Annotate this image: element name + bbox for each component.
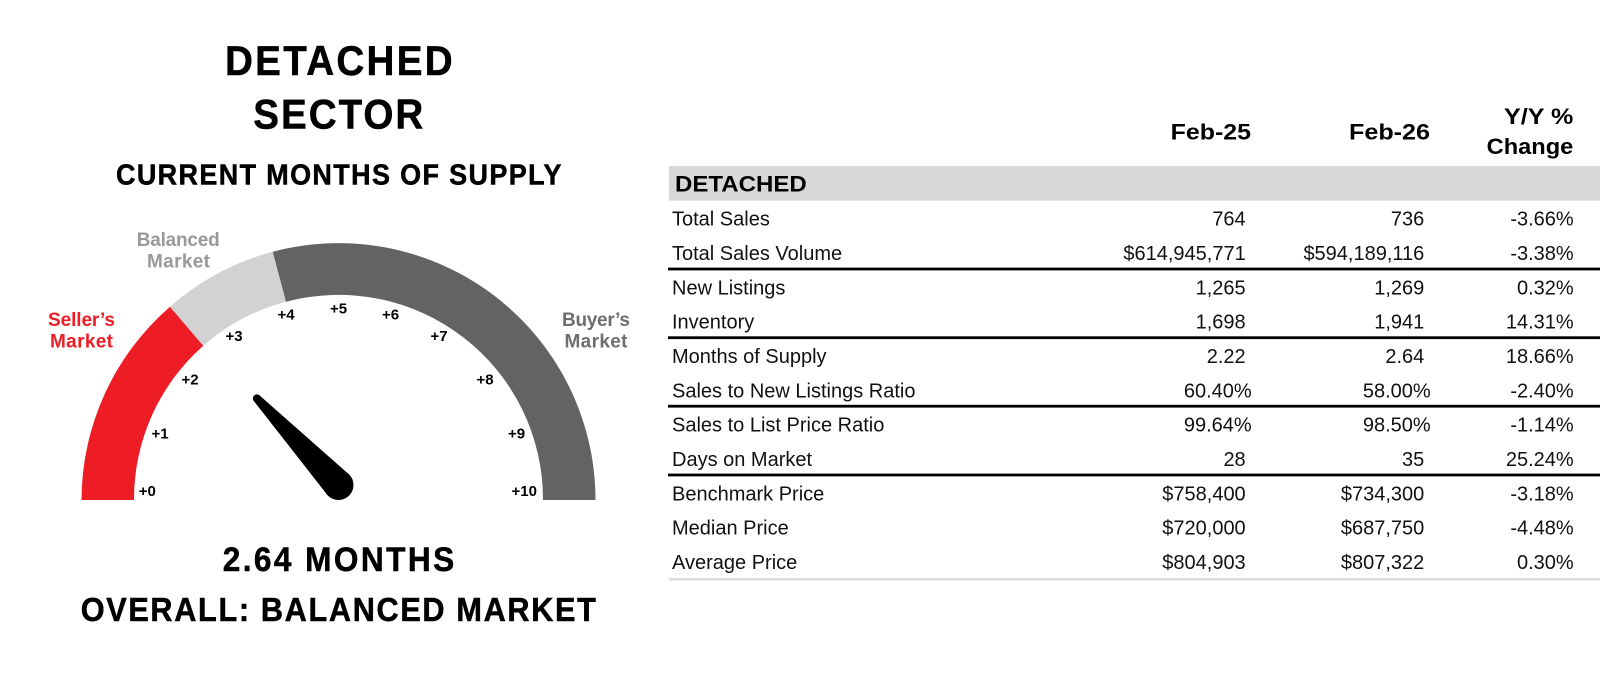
row: sales to list price ratio: Sales to List Price Ratio: [672, 415, 884, 437]
row: total sales: 736: [1391, 209, 1424, 231]
row: average price: Average Price: [672, 552, 797, 574]
row: days on market: 28: [1223, 449, 1246, 471]
gauge scale ticks: +7: [430, 328, 448, 345]
table column headers: Feb-26: [1349, 119, 1430, 144]
row: total sales: Total Sales: [672, 209, 770, 231]
gauge scale ticks: +0: [139, 483, 156, 500]
row: total sales: [672, 209, 1574, 231]
row: total sales volume: $594,189,116: [1303, 243, 1424, 265]
reading: overall market: OVERALL: BALANCED MARKET: [81, 591, 596, 628]
row: sales to new listings ratio: [672, 380, 1574, 402]
title: DETACHED: [225, 36, 453, 84]
row: average price: $804,903: [1162, 552, 1246, 574]
gauge scale ticks: +5: [330, 301, 347, 318]
row: new listings: New Listings: [672, 277, 785, 299]
table: [668, 104, 1600, 581]
row: total sales volume: [672, 243, 1574, 265]
row: new listings: 1,265: [1196, 277, 1246, 299]
row: new listings: 0.32%: [1517, 277, 1574, 299]
row: months of supply: [672, 346, 1574, 368]
label: seller's market: Market: [50, 332, 114, 353]
subtitle: current months of supply: CURRENT MONTHS OF SUPPLY: [116, 158, 562, 191]
row: sales to list price ratio: [672, 415, 1574, 437]
label: seller's market: Seller’s: [48, 310, 115, 331]
table column headers: Feb-25: [1171, 119, 1251, 144]
gauge scale ticks: +4: [278, 306, 295, 323]
row: median price: -4.48%: [1510, 518, 1574, 540]
row: months of supply: 2.64: [1385, 346, 1424, 368]
label: buyer's market: [562, 310, 630, 353]
row: new listings: 1,269: [1374, 277, 1424, 299]
row: total sales: 764: [1212, 209, 1246, 231]
row: inventory: 14.31%: [1506, 312, 1574, 334]
row: median price: $687,750: [1341, 518, 1424, 540]
gauge segment: buyer's market: [273, 243, 596, 500]
gauge chart: [48, 230, 630, 500]
row: average price: 0.30%: [1517, 552, 1574, 574]
row: sales to list price ratio: 98.50%: [1363, 415, 1431, 437]
row: average price: $807,322: [1341, 552, 1424, 574]
gauge scale ticks: +3: [226, 328, 243, 345]
gauge scale ticks: [139, 301, 537, 500]
title: SECTOR: [253, 90, 423, 138]
label: balanced market: [137, 230, 220, 273]
gauge scale ticks: +2: [182, 371, 199, 388]
gauge segment: balanced market: [170, 252, 286, 346]
row: inventory: Inventory: [672, 312, 754, 334]
table column headers: Y/Y %: [1504, 104, 1573, 129]
row: median price: [672, 518, 1574, 540]
row: days on market: 35: [1402, 449, 1424, 471]
label: balanced market: Balanced: [137, 230, 220, 251]
row: sales to new listings ratio: Sales to New Listings Ratio: [672, 380, 915, 402]
gauge scale ticks: +1: [152, 425, 169, 442]
label: seller's market: [48, 310, 115, 353]
table column headers: [1171, 104, 1573, 159]
row: median price: Median Price: [672, 518, 789, 540]
row: sales to new listings ratio: 58.00%: [1363, 380, 1431, 402]
row: total sales: -3.66%: [1510, 209, 1574, 231]
row: months of supply: 18.66%: [1506, 346, 1574, 368]
row: benchmark price: $734,300: [1341, 483, 1424, 505]
gauge segment: seller's market: [82, 307, 203, 500]
gauge scale ticks: +6: [382, 306, 399, 323]
row: inventory: [672, 312, 1574, 334]
title: [225, 36, 453, 138]
table column headers: Change: [1487, 134, 1573, 159]
row: sales to new listings ratio: -2.40%: [1510, 380, 1574, 402]
row: days on market: [672, 449, 1574, 471]
row: benchmark price: Benchmark Price: [672, 483, 824, 505]
row: total sales volume: $614,945,771: [1123, 243, 1246, 265]
row: sales to new listings ratio: 60.40%: [1184, 380, 1252, 402]
row: benchmark price: -3.18%: [1510, 483, 1574, 505]
gauge needle: [253, 394, 354, 500]
row: months of supply: 2.22: [1207, 346, 1246, 368]
row: total sales volume: Total Sales Volume: [672, 243, 842, 265]
row: median price: $720,000: [1162, 518, 1246, 540]
row: sales to list price ratio: -1.14%: [1510, 415, 1574, 437]
section band: detached: [669, 166, 1600, 201]
row: days on market: 25.24%: [1506, 449, 1574, 471]
row: months of supply: Months of Supply: [672, 346, 827, 368]
row: benchmark price: [672, 483, 1574, 505]
gauge scale ticks: +8: [476, 371, 494, 388]
row: days on market: Days on Market: [672, 449, 812, 471]
row: total sales volume: -3.38%: [1510, 243, 1574, 265]
row: new listings: [672, 277, 1574, 299]
label: balanced market: Market: [147, 252, 211, 273]
section band: detached: DETACHED: [675, 172, 807, 197]
gauge scale ticks: +10: [512, 483, 537, 500]
row: inventory: 1,698: [1196, 312, 1246, 334]
row: sales to list price ratio: 99.64%: [1184, 415, 1252, 437]
gauge scale ticks: +9: [508, 425, 525, 442]
label: buyer's market: Buyer’s: [562, 310, 630, 331]
row: average price: [672, 552, 1574, 574]
row: benchmark price: $758,400: [1162, 483, 1246, 505]
reading: months value: 2.64 MONTHS: [223, 540, 454, 578]
row: inventory: 1,941: [1374, 312, 1424, 334]
label: buyer's market: Market: [564, 332, 628, 353]
